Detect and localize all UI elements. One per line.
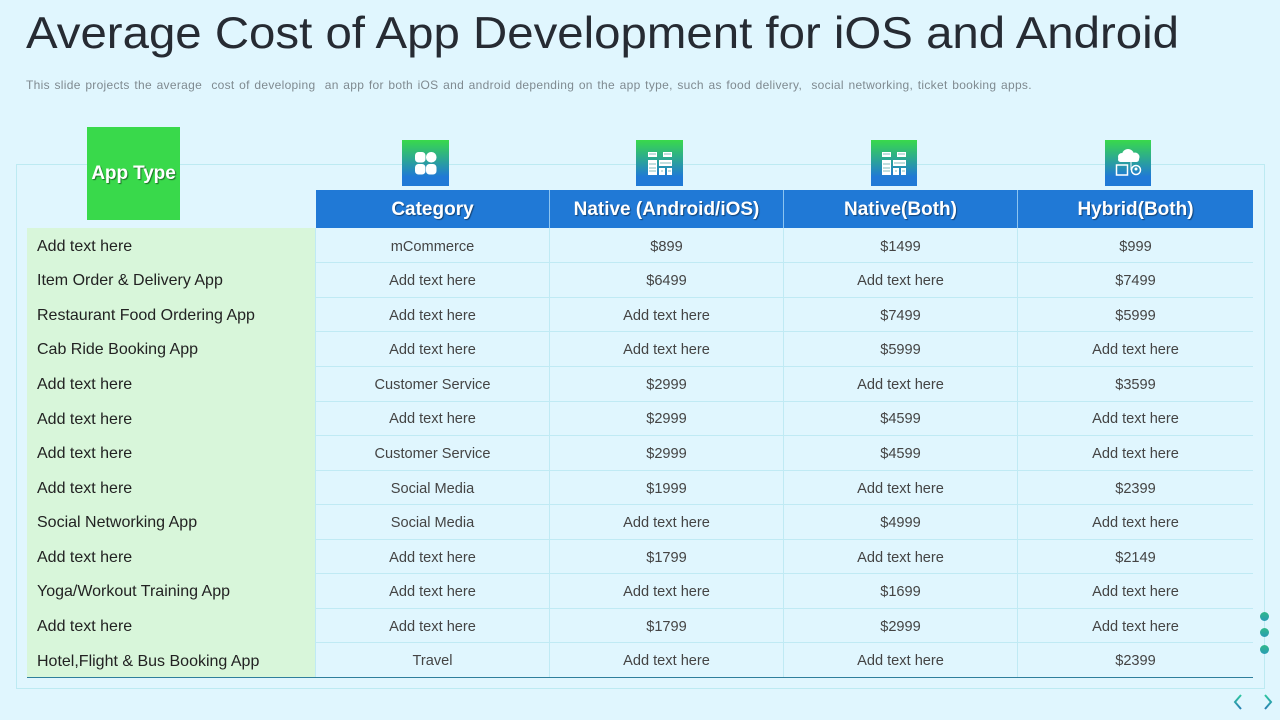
row 9 <box>27 504 1253 540</box>
row 6: Add text here <box>1092 411 1179 427</box>
row 5: Customer Service <box>374 377 490 393</box>
row 9: $4999 <box>880 515 921 531</box>
row 9: Social Media <box>391 515 474 531</box>
row 9: Social Networking App <box>37 514 197 531</box>
header: native both <box>784 190 1018 228</box>
row 10 <box>27 539 1253 574</box>
header: category <box>316 190 550 228</box>
row 8: Add text here <box>37 480 132 497</box>
row 11: $1699 <box>880 584 921 600</box>
navigation dots <box>1260 612 1269 654</box>
row 10: Add text here <box>389 550 476 566</box>
row 10: Add text here <box>857 550 944 566</box>
row 11: Add text here <box>1092 584 1179 600</box>
row 5 <box>27 366 1253 402</box>
row 4: $5999 <box>880 342 921 358</box>
row 12: Add text here <box>1092 619 1179 635</box>
row 12: Add text here <box>389 619 476 635</box>
row 2 <box>27 262 1253 298</box>
header: native android/ios: Native (Android/iOS) <box>574 199 759 220</box>
row 12: Add text here <box>37 618 132 635</box>
row 3 <box>27 297 1253 332</box>
app type heading: App Type <box>91 163 176 184</box>
row 1: $999 <box>1119 239 1152 255</box>
row 5: Add text here <box>857 377 944 393</box>
row 12: $1799 <box>646 619 687 635</box>
row 13: $2399 <box>1115 653 1156 669</box>
row 10: $2149 <box>1115 550 1156 566</box>
row 3: Add text here <box>389 308 476 324</box>
row 8: Social Media <box>391 481 474 497</box>
row 7 <box>27 435 1253 471</box>
row 8: $1999 <box>646 481 687 497</box>
row 1 <box>27 228 1253 263</box>
header: native android/ios <box>550 190 784 228</box>
row 6: Add text here <box>37 411 132 428</box>
row 5: Add text here <box>37 376 132 393</box>
row 13: Hotel,Flight & Bus Booking App <box>37 653 259 670</box>
icon: previous arrow <box>1234 694 1242 710</box>
row 4: Add text here <box>389 342 476 358</box>
row 13: Add text here <box>857 653 944 669</box>
row 1: $1499 <box>880 239 921 255</box>
icon: category grid <box>402 140 449 186</box>
row 2: Item Order & Delivery App <box>37 272 223 289</box>
row 1: Add text here <box>37 238 132 255</box>
row 7: Add text here <box>1092 446 1179 462</box>
row 12: $2999 <box>880 619 921 635</box>
row 7: Add text here <box>37 445 132 462</box>
icon: native both layout <box>871 140 917 186</box>
row 6: Add text here <box>389 411 476 427</box>
header: hybrid both: Hybrid(Both) <box>1077 199 1194 220</box>
row 4: Add text here <box>623 342 710 358</box>
row 8: $2399 <box>1115 481 1156 497</box>
row 5: $3599 <box>1115 377 1156 393</box>
icon: native app layout <box>636 140 683 186</box>
row 7: $4599 <box>880 446 921 462</box>
icon: next arrow <box>1264 694 1272 710</box>
header: hybrid both <box>1018 190 1253 228</box>
row 7: Customer Service <box>374 446 490 462</box>
row 13 <box>27 642 1253 678</box>
row 1: mCommerce <box>391 239 474 255</box>
row 4: Cab Ride Booking App <box>37 341 198 358</box>
row 11 <box>27 573 1253 609</box>
row 6: $4599 <box>880 411 921 427</box>
table frame <box>16 164 1265 689</box>
row 11: Add text here <box>389 584 476 600</box>
row 1: $899 <box>650 239 683 255</box>
row 4 <box>27 331 1253 367</box>
title: Average Cost of App Development for iOS and Android <box>26 9 1179 58</box>
app type heading <box>87 127 180 220</box>
row 2: Add text here <box>857 273 944 289</box>
icon: hybrid cloud <box>1105 140 1151 186</box>
row 6 <box>27 401 1253 436</box>
row 3: $5999 <box>1115 308 1156 324</box>
row 3: Add text here <box>623 308 710 324</box>
row 2: Add text here <box>389 273 476 289</box>
row 11: Yoga/Workout Training App <box>37 583 230 600</box>
row 3: $7499 <box>880 308 921 324</box>
row 13: Travel <box>412 653 452 669</box>
row 8 <box>27 470 1253 505</box>
row 12 <box>27 608 1253 643</box>
header: category: Category <box>391 199 474 220</box>
row 9: Add text here <box>1092 515 1179 531</box>
row 10: Add text here <box>37 549 132 566</box>
row 13: Add text here <box>623 653 710 669</box>
row 2: $6499 <box>646 273 687 289</box>
row 9: Add text here <box>623 515 710 531</box>
header: native both: Native(Both) <box>844 199 957 220</box>
row 5: $2999 <box>646 377 687 393</box>
row 4: Add text here <box>1092 342 1179 358</box>
row 11: Add text here <box>623 584 710 600</box>
row 2: $7499 <box>1115 273 1156 289</box>
row 10: $1799 <box>646 550 687 566</box>
row 6: $2999 <box>646 411 687 427</box>
row 8: Add text here <box>857 481 944 497</box>
subtitle: This slide projects the average cost of developing an app for both iOS and android depending on the app type, such as food delivery, social networking, ticket booking apps. <box>26 78 1032 92</box>
row 7: $2999 <box>646 446 687 462</box>
row 3: Restaurant Food Ordering App <box>37 307 255 324</box>
